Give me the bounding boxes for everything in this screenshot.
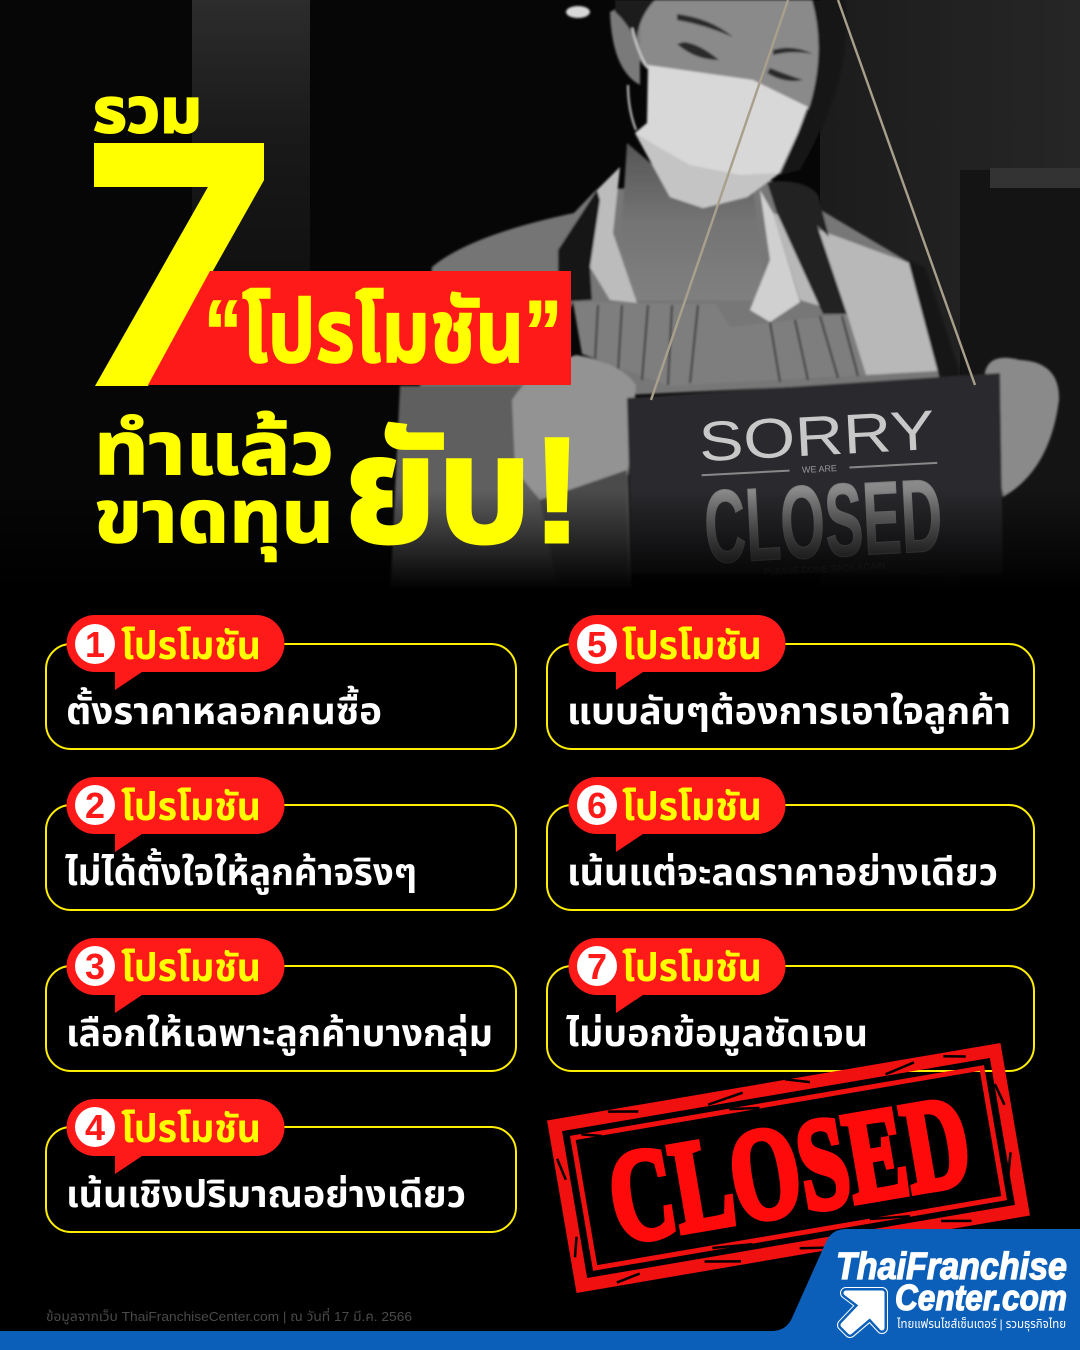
card 5: 5: [587, 624, 607, 665]
icon: logo arrow: [843, 1293, 882, 1332]
card 5: โปรโมชัน: [622, 625, 762, 668]
card 7: ไม่บอกข้อมูลชัดเจน: [566, 1013, 868, 1056]
card 1: [46, 615, 516, 749]
title: ทำแล้ว ขาดทุน: ขาดทุน: [94, 475, 334, 562]
card 3: โปรโมชัน: [121, 947, 261, 990]
title: ทำแล้ว ขาดทุน: [94, 407, 334, 562]
card 3: [46, 938, 516, 1071]
card 6: [547, 777, 1034, 910]
photo sign text: [697, 398, 945, 586]
photo sign text: WE ARE: [802, 463, 837, 475]
card 7: [547, 938, 1034, 1071]
footer source note: ข้อมูลจากเว็บ ThaiFranchiseCenter.com | ณ วันที่ 17 มี.ค. 2566: [46, 1307, 412, 1324]
card 1: โปรโมชัน: [121, 625, 261, 668]
logo: ThaiFranchiseCenter.com: ไทยแฟรนไชส์เซ็นเตอร์ | รวมธุรกิจไทย: [896, 1317, 1066, 1331]
title: red banner with โปรโมชัน: [148, 271, 571, 385]
card 7: โปรโมชัน: [622, 947, 762, 990]
card 4: [46, 1099, 516, 1232]
title: large numeral 7: 7: [41, 77, 308, 465]
photo sign text: PLEASE COME BACK AGAIN: [764, 561, 886, 577]
title: ยับ!: ยับ!: [344, 406, 582, 574]
card 2: 2: [85, 785, 105, 826]
photo sign text: SORRY: [697, 398, 936, 473]
card 6: โปรโมชัน: [622, 786, 762, 829]
card 4: 4: [85, 1107, 105, 1148]
card 2: โปรโมชัน: [121, 786, 261, 829]
card 2: [46, 777, 516, 910]
card 1: ตั้งราคาหลอกคนซื้อ: [66, 685, 382, 732]
title: ทำแล้ว ขาดทุน: ทำแล้ว: [94, 407, 334, 490]
background photo: shopkeeper holding closed sign: [0, 0, 1080, 608]
card 5: แบบลับๆต้องการเอาใจลูกค้า: [567, 691, 1011, 734]
card 3: เลือกให้เฉพาะลูกค้าบางกลุ่ม: [66, 1013, 493, 1056]
card 3: 3: [85, 946, 105, 987]
card 6: 6: [587, 785, 607, 826]
card 4: โปรโมชัน: [121, 1108, 261, 1151]
card 4: เน้นเชิงปริมาณอย่างเดียว: [66, 1174, 466, 1215]
logo: ThaiFranchiseCenter.com: [0, 1229, 1080, 1350]
card 6: เน้นแต่จะลดราคาอย่างเดียว: [567, 852, 998, 893]
card 2: ไม่ได้ตั้งใจให้ลูกค้าจริงๆ: [65, 847, 417, 895]
title: red banner with โปรโมชัน: “โปรโมชัน”: [204, 282, 562, 381]
title: รวม: รวม: [93, 77, 202, 146]
card 7: 7: [587, 946, 607, 987]
card 5: [547, 615, 1034, 749]
card 1: 1: [85, 624, 105, 665]
